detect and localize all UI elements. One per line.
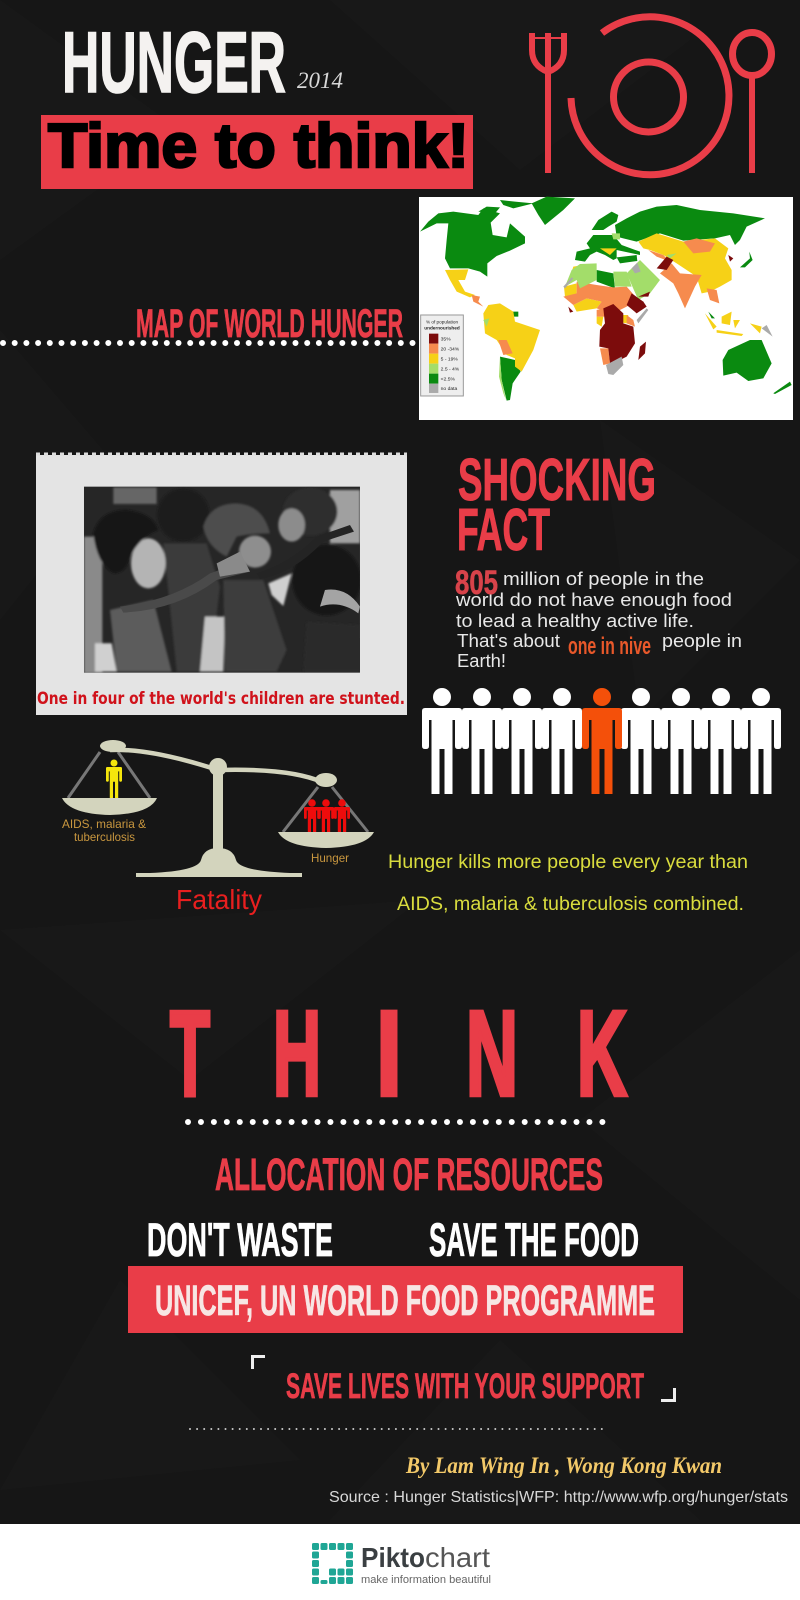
icon: nine people, one highlighted (422, 688, 781, 794)
heading: THINK: K (577, 985, 627, 1121)
map legend: 20 -34% (441, 346, 460, 352)
map legend: 35% (441, 336, 451, 342)
text: 805 million fact: one in nive (568, 633, 651, 660)
text: 805 million fact (455, 564, 742, 671)
text: 805 million fact: 805 (455, 564, 498, 602)
scale labels: Hunger (311, 851, 349, 865)
text: 805 million fact: to lead a healthy active life. (456, 611, 694, 631)
icon: opening bracket (252, 1356, 265, 1369)
logo: Piktochart (312, 1542, 491, 1586)
footer band (0, 1524, 800, 1600)
heading: THINK: H (273, 985, 321, 1121)
logo: Piktochart: Pikto (361, 1542, 425, 1573)
icon: balance scale (62, 740, 374, 915)
map legend (421, 315, 463, 396)
icon: yellow person (106, 760, 122, 798)
text: 805 million fact: people in (662, 631, 742, 651)
text: 805 million fact: That's about (457, 631, 560, 651)
map legend: % of population (426, 319, 458, 324)
heading: THINK: N (466, 985, 518, 1121)
logo: Piktochart: make information beautiful (361, 1574, 491, 1586)
map of world hunger (419, 197, 793, 420)
icon: fork, plate and spoon (530, 17, 772, 175)
heading: THINK (170, 985, 627, 1121)
scale labels (62, 817, 349, 865)
icon: closing bracket (661, 1388, 674, 1400)
text: 805 million fact: world do not have enough food (455, 590, 732, 610)
text: 805 million fact: million of people in the (503, 569, 704, 589)
map legend: <2.5% (441, 376, 456, 382)
source line: Source : Hunger Statistics|WFP: http://www.wfp.org/hunger/stats (329, 1489, 788, 1506)
heading: shocking fact: SHOCKING (458, 447, 656, 513)
heading: map of world hunger: MAP OF WORLD HUNGER (136, 302, 403, 346)
map legend: 5 - 19% (441, 356, 458, 362)
label: fatality: Fatality (176, 884, 262, 915)
photo: malnourished children reaching out (84, 487, 361, 673)
scale labels: tuberculosis (74, 830, 135, 844)
panel: photo of children (36, 454, 407, 715)
dotted divider small (190, 1428, 608, 1430)
banner: Time to think!: Time to think! (48, 112, 469, 181)
text: don't waste: DON'T WASTE (147, 1213, 333, 1266)
credits: authors: By Lam Wing In , Wong Kong Kwan (405, 1453, 722, 1478)
text: hunger kills more: AIDS, malaria & tuberculosis combined. (397, 894, 744, 915)
text: hunger kills more: Hunger kills more people every year than (388, 852, 748, 873)
text: hunger kills more (388, 852, 748, 915)
map legend: 2.5 - 4% (441, 366, 460, 372)
heading: THINK: T (170, 985, 210, 1121)
heading: shocking fact (457, 447, 656, 563)
dotted divider to map (3, 340, 417, 346)
map legend: no data (441, 386, 458, 392)
dotted divider (188, 1119, 604, 1125)
text: 805 million fact: Earth! (457, 651, 506, 671)
heading: shocking fact: FACT (457, 497, 550, 563)
caption: stunted children: One in four of the world's children are stunted. (37, 689, 405, 708)
banner: UNICEF, UN World Food Programme (128, 1266, 683, 1333)
title: Hunger 2014: HUNGER (62, 15, 286, 111)
heading: THINK: I (376, 985, 402, 1121)
title: Hunger 2014: 2014 (297, 68, 343, 93)
logo: Piktochart: chart (425, 1542, 490, 1573)
scale labels: AIDS, malaria & (62, 817, 146, 831)
icon: red people (304, 799, 350, 832)
text: save the food: SAVE THE FOOD (429, 1213, 639, 1266)
map legend: undernourished (424, 326, 460, 331)
